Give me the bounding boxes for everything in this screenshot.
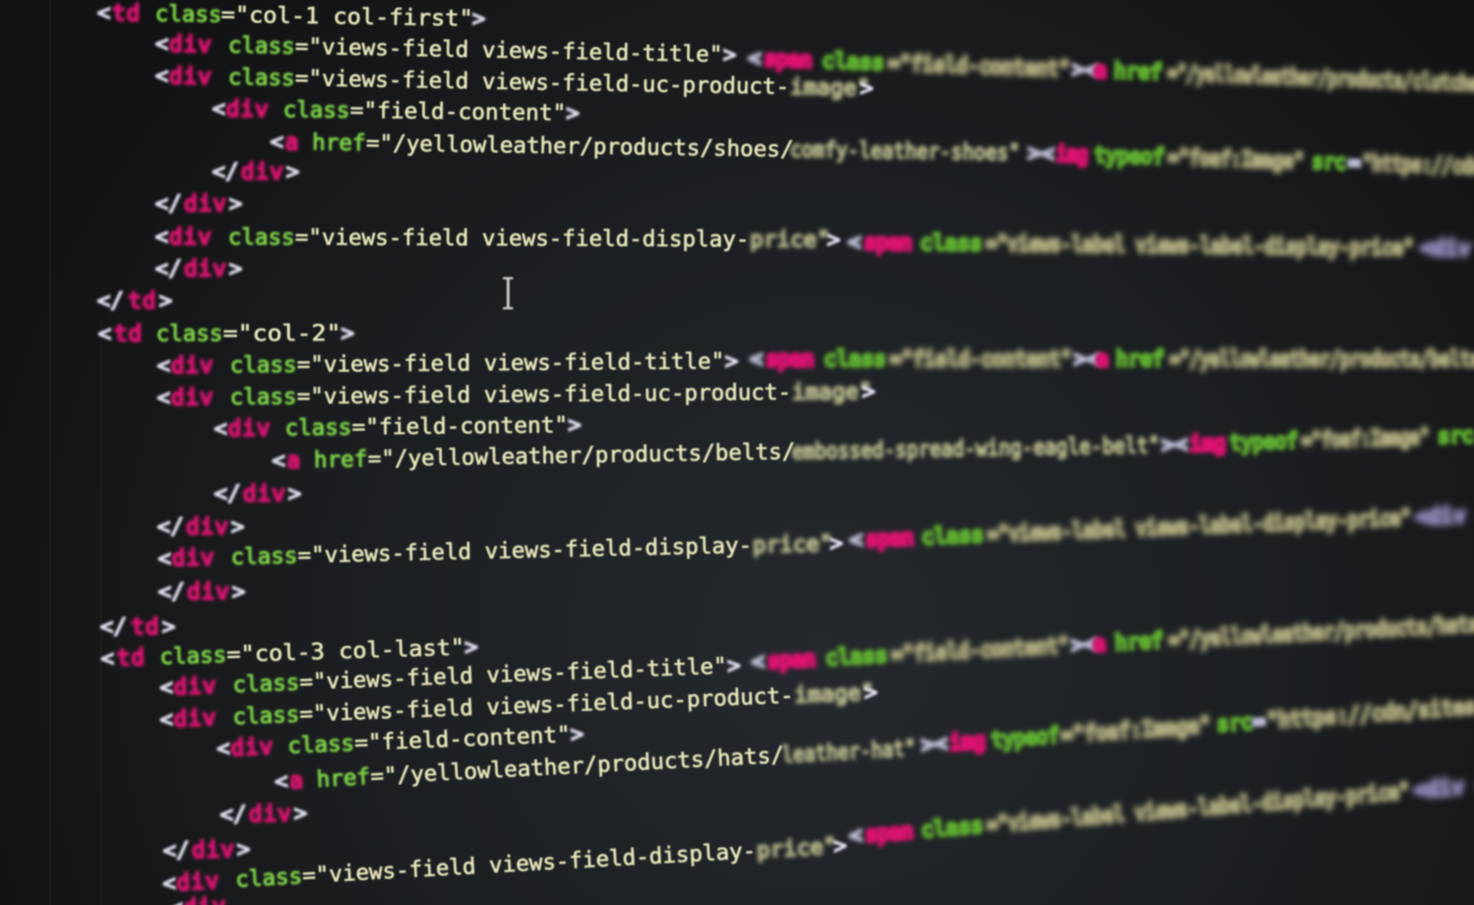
- code line: field-content, column 2: <: [214, 416, 227, 442]
- code line: uc-product-image, column 3: <: [159, 707, 174, 733]
- code line: hats link: leather-hat": [781, 735, 916, 768]
- blurred continuation: belts image: ="foaf:Image": [1301, 425, 1430, 453]
- code line: shoes link: a: [285, 129, 300, 155]
- code line: display-price, column 2: class: [231, 543, 298, 570]
- code line: belts link: [272, 433, 1160, 474]
- code line: td col-3: >: [464, 634, 478, 661]
- code line: td col-1: class: [155, 1, 222, 28]
- blurred continuation: span and link, column 2: <: [750, 347, 763, 371]
- code line: uc-product-image, column 1: ="views-field views-field-uc-product-: [295, 65, 790, 100]
- code line: td col-1: ="col-1 col-first": [221, 2, 473, 32]
- code line: views-field-title, column 1: div: [169, 31, 212, 58]
- code line: closing td: >: [159, 288, 172, 314]
- blurred continuation: span and link, column 2: href: [1116, 347, 1164, 371]
- code line: display-price, column 1: <: [155, 224, 168, 250]
- blurred continuation: span and link, column 3: ><: [1071, 632, 1097, 657]
- code line: closing div: >: [237, 836, 250, 863]
- blurred continuation: span and link, column 3: span: [767, 647, 816, 673]
- code line: closing div: </: [214, 481, 241, 507]
- code line: belts link: embossed-spread-wing-eagle-belt": [792, 433, 1160, 465]
- code line: closing div: </: [212, 159, 239, 185]
- code line: td col-1: <: [97, 0, 111, 26]
- code line: closing div: >: [232, 579, 245, 605]
- code line: uc-product-image, column 2: image": [792, 379, 872, 405]
- code line: views-field-title, column 1: >: [723, 42, 737, 68]
- code line: td col-3: td: [116, 645, 146, 671]
- blurred continuation: price label, column 3: class: [920, 813, 984, 842]
- code line: closing td: [100, 614, 175, 640]
- code line: display-price, column 3: price": [756, 833, 837, 864]
- code line: views-field-title, column 2: class: [230, 352, 297, 378]
- blurred continuation: price label, column 3: <: [848, 823, 863, 848]
- code line: hats link: href: [316, 764, 371, 793]
- code line: closing div: [212, 159, 299, 185]
- code line: td col-1: >: [472, 6, 486, 32]
- code line: closing td: td: [131, 614, 160, 640]
- code line: closing div: [155, 191, 242, 217]
- blurred continuation: hats image: [921, 694, 1474, 757]
- blurred continuation: shoes image: typeof: [1094, 143, 1165, 169]
- code line: closing div: </: [163, 838, 190, 864]
- code line: belts link: a: [287, 447, 301, 474]
- code line: uc-product-image, column 2: div: [171, 385, 214, 411]
- code line: uc-product-image, column 1: [155, 63, 874, 102]
- code line: views-field-title, column 1: class: [228, 32, 295, 60]
- text cursor: [503, 277, 513, 309]
- blurred continuation: span and link, column 1: ><: [1072, 57, 1098, 82]
- code line: views-field-title, column 3: [159, 653, 741, 701]
- code line: closing div: >: [286, 159, 299, 185]
- code line: display-price, column 2: price": [752, 531, 833, 558]
- code line: hats link: ="/yellowleather/products/hats/: [370, 742, 785, 790]
- code line: field-content, column 2: >: [568, 412, 581, 438]
- code line: field-content, column 1: >: [566, 100, 580, 126]
- code line: display-price, column 3: >: [833, 833, 848, 859]
- blurred continuation: span and link, column 1: href: [1114, 59, 1162, 84]
- code line: field-content, column 3: div: [230, 734, 274, 761]
- code line: uc-product-image, column 2: ="views-field views-field-uc-product-: [297, 379, 791, 410]
- code line: views-field-title, column 1: ="views-field views-field-title": [295, 34, 723, 68]
- code line: display-price, column 1: class: [228, 224, 295, 251]
- blurred continuation: shoes image: img: [1056, 142, 1089, 167]
- code line: closing div: [157, 514, 244, 540]
- code line: display-price, column 1: ="views-field views-field-display-: [295, 225, 749, 253]
- blurred continuation: span and link, column 1: [748, 46, 1474, 96]
- code line: display-price, column 2: ="views-field views-field-display-: [298, 533, 752, 569]
- code line: uc-product-image, column 1: >: [860, 75, 874, 102]
- code line: display-price, column 3: [162, 833, 848, 897]
- code line: field-content, column 2: ="field-content": [352, 412, 568, 441]
- code line: display-price, column 1: div: [169, 224, 212, 250]
- blurred continuation: span and link, column 2: ="field-content": [890, 347, 1072, 371]
- code line: closing div: div: [243, 481, 286, 507]
- code line: closing div: </: [220, 802, 247, 828]
- code line: uc-product-image, column 3: >: [864, 679, 878, 706]
- code line: views-field-title, column 3: ="views-field views-field-title": [299, 653, 727, 696]
- code line: hats link: a: [289, 767, 305, 794]
- code line: uc-product-image, column 1: image": [790, 74, 870, 101]
- code line: closing div: div: [184, 256, 227, 282]
- code line: closing div: </: [155, 191, 182, 217]
- code line: closing div: >: [294, 800, 307, 827]
- code line: field-content, column 3: <: [216, 735, 231, 762]
- code line: closing div: [155, 256, 242, 282]
- blurred continuation: span and link, column 3: ="field-content": [891, 633, 1070, 667]
- code line: uc-product-image, column 3: ="views-field views-field-uc-product-: [299, 683, 794, 728]
- code line: shoes link: <: [270, 129, 284, 155]
- code line: closing div: div: [249, 801, 292, 827]
- code line: views-field-title, column 2: ="views-field views-field-title": [297, 349, 724, 378]
- code line: shoes link: comfy-leather-shoes": [790, 137, 1020, 166]
- code line: closing div: [214, 481, 301, 507]
- code line: uc-product-image, column 2: class: [230, 384, 297, 410]
- code line: views-field-title, column 2: <: [157, 353, 170, 379]
- code line: uc-product-image, column 2: <: [157, 385, 170, 411]
- code line: field-content, column 1: class: [283, 97, 350, 124]
- blurred continuation: span and link, column 2: class: [824, 347, 886, 371]
- blurred continuation: span and link, column 1: <: [748, 46, 761, 70]
- code line: display-price, column 1: [155, 224, 840, 253]
- code line: closing td: </: [97, 288, 124, 314]
- code line: display-price, column 2: [158, 530, 843, 572]
- code line: closing div: >: [231, 514, 244, 540]
- code line: field-content, column 1: div: [226, 96, 269, 123]
- code line: belts link: href: [314, 446, 368, 473]
- blurred continuation: shoes image: [1028, 141, 1474, 178]
- code line: closing div: div: [186, 514, 229, 540]
- code line: views-field-title, column 2: >: [725, 348, 738, 375]
- code line: belts link: <: [272, 448, 285, 474]
- blurred continuation: belts image: img: [1189, 431, 1226, 456]
- blurred continuation: span and link, column 3: class: [825, 643, 888, 670]
- code line: display-price, column 3: <: [162, 870, 177, 897]
- code line: field-content, column 2: [214, 412, 581, 442]
- code line: uc-product-image, column 3: div: [173, 705, 217, 732]
- blurred continuation: span and link, column 2: ><: [1074, 347, 1099, 371]
- code line: td col-3: class: [159, 642, 227, 670]
- code line: td col-2: class: [156, 321, 223, 347]
- blurred continuation: price label, column 2: class: [921, 523, 984, 549]
- blurred continuation: belts image: typeof: [1229, 429, 1298, 455]
- code line: field-content, column 1: ="field-content": [350, 98, 566, 126]
- code line: td col-2: [98, 321, 354, 347]
- code line: views-field-title, column 1: <: [155, 31, 169, 57]
- code line: uc-product-image, column 1: class: [228, 64, 295, 91]
- code line: closing div: div: [187, 579, 230, 605]
- code line: views-field-title, column 2: div: [171, 353, 214, 379]
- blurred continuation: span and link, column 1: class: [822, 49, 885, 75]
- code line: field-content, column 3: class: [287, 730, 355, 759]
- code line: uc-product-image, column 3: image": [794, 680, 875, 709]
- code line: td col-1: td: [112, 0, 141, 27]
- code line: closing td: >: [162, 614, 175, 640]
- code line: closing div: >: [229, 191, 242, 217]
- code line: field-content, column 3: >: [570, 721, 584, 748]
- code line: td col-3: [100, 634, 478, 672]
- blurred continuation: price label, column 1: class: [920, 231, 982, 255]
- code line: closing div: div: [192, 837, 235, 863]
- code line: uc-product-image, column 2: [157, 379, 875, 411]
- blurred continuation: hats image: img: [949, 729, 986, 755]
- blurred continuation: belts image: [1161, 423, 1474, 457]
- code line: td col-3: <: [100, 646, 115, 672]
- code line: field-content, column 3: [216, 721, 584, 762]
- code line: closing div: div: [241, 159, 284, 185]
- blurred continuation: span and link, column 2: span: [766, 347, 814, 371]
- blurred continuation: hats image: ="foaf:Image": [1060, 713, 1212, 747]
- code line: belts link: ="/yellowleather/products/belts/: [368, 439, 795, 472]
- code line: closing td: [97, 288, 172, 314]
- code line: td col-2: <: [98, 321, 111, 347]
- blurred continuation: price label, column 2: <: [849, 528, 863, 552]
- blurred continuation: price label, column 1: <: [848, 230, 861, 254]
- blurred continuation: shoes image: src: [1312, 149, 1346, 174]
- code line: views-field-title, column 3: class: [232, 670, 300, 698]
- code line: shoes link: [270, 129, 1020, 166]
- code line: field-content, column 3: ="field-content": [354, 722, 571, 756]
- blurred continuation: span and link, column 1: a: [1094, 58, 1107, 83]
- code line: display-price, column 2: >: [829, 530, 843, 557]
- code line: display-price, column 1: >: [827, 227, 840, 253]
- code line: uc-product-image, column 3: [159, 679, 878, 733]
- code line: td col-3: ="col-3 col-last": [226, 635, 465, 668]
- code line: display-price, column 2: div: [172, 545, 215, 572]
- code line: field-content, column 2: div: [228, 415, 271, 442]
- code line: views-field-title, column 3: <: [159, 675, 174, 701]
- code line: uc-product-image, column 1: <: [155, 63, 169, 89]
- blurred continuation: hats image: =: [1252, 709, 1266, 734]
- code line: uc-product-image, column 3: class: [232, 702, 300, 730]
- blurred continuation: span and link, column 2: [750, 347, 1474, 371]
- blurred continuation: span and link, column 3: a: [1093, 631, 1106, 656]
- code line: display-price, column 3: div: [176, 868, 220, 896]
- blurred continuation: hats image: typeof: [991, 723, 1060, 752]
- blurred continuation: span and link, column 1: ="field-content": [888, 51, 1070, 81]
- code line: closing div: >: [288, 481, 301, 507]
- code line: display-price, column 1: price": [750, 227, 830, 253]
- code line: hats link: [274, 735, 916, 795]
- blurred continuation: price label, column 2: [849, 502, 1474, 552]
- code line: td col-2: td: [114, 321, 143, 347]
- code line: views-field-title, column 3: div: [173, 673, 217, 700]
- code line: display-price, column 2: <: [158, 546, 171, 572]
- code line: views-field-title, column 3: >: [727, 653, 741, 679]
- code line: closing div: [163, 836, 250, 864]
- blurred continuation: hats image: src: [1216, 710, 1254, 736]
- code line: closing td: </: [100, 614, 127, 640]
- code line: closing div: [220, 800, 307, 828]
- blurred continuation: belts image: ><: [1161, 432, 1188, 457]
- code line: uc-product-image, column 1: div: [169, 63, 212, 90]
- blurred continuation: span and link, column 3: href: [1115, 628, 1164, 655]
- code line: closing div: div: [184, 191, 227, 217]
- code line: closing div: </: [157, 514, 184, 540]
- code line: td col-2: >: [341, 321, 354, 347]
- code line: td col-2: ="col-2": [223, 321, 341, 347]
- code line: closing td: td: [128, 288, 157, 314]
- blurred continuation: price label, column 3: [848, 772, 1474, 848]
- code line: views-field-title, column 1: [155, 31, 737, 68]
- code line: closing div: >: [229, 256, 242, 282]
- code line: closing div: </: [155, 256, 182, 282]
- blurred continuation: span and link, column 3: <: [751, 649, 765, 674]
- code line: closing div: [158, 579, 245, 605]
- blurred continuation: price label, column 2: span: [865, 525, 914, 551]
- code line: display-price, column 3: class: [235, 863, 303, 893]
- blurred continuation: span and link, column 2: a: [1096, 347, 1109, 371]
- code line: closing div: </: [158, 579, 185, 605]
- code line: field-content, column 2: class: [285, 415, 352, 441]
- blurred continuation: shoes image: =: [1348, 151, 1361, 175]
- blurred continuation: price label, column 3: span: [864, 819, 914, 847]
- code line: uc-product-image, column 2: >: [862, 379, 875, 405]
- code line: shoes link: ="/yellowleather/products/shoes/: [366, 130, 794, 163]
- blurred continuation: hats image: ><: [921, 731, 948, 757]
- blurred continuation: price label, column 1: span: [864, 230, 912, 255]
- code line: hats link: <: [274, 768, 289, 795]
- code line: field-content, column 1: [212, 96, 580, 126]
- blurred continuation: span and link, column 1: span: [764, 47, 813, 72]
- code line: shoes link: href: [312, 130, 366, 156]
- blurred continuation: shoes image: ><: [1028, 141, 1055, 166]
- code line: td col-1: [97, 0, 486, 32]
- code line: field-content, column 1: <: [212, 96, 226, 122]
- blurred continuation: shoes image: ="foaf:Image": [1168, 145, 1304, 173]
- blurred continuation: span and link, column 3: [751, 612, 1474, 674]
- code line: display-price, column 3: ="views-field views-field-display-: [302, 838, 757, 889]
